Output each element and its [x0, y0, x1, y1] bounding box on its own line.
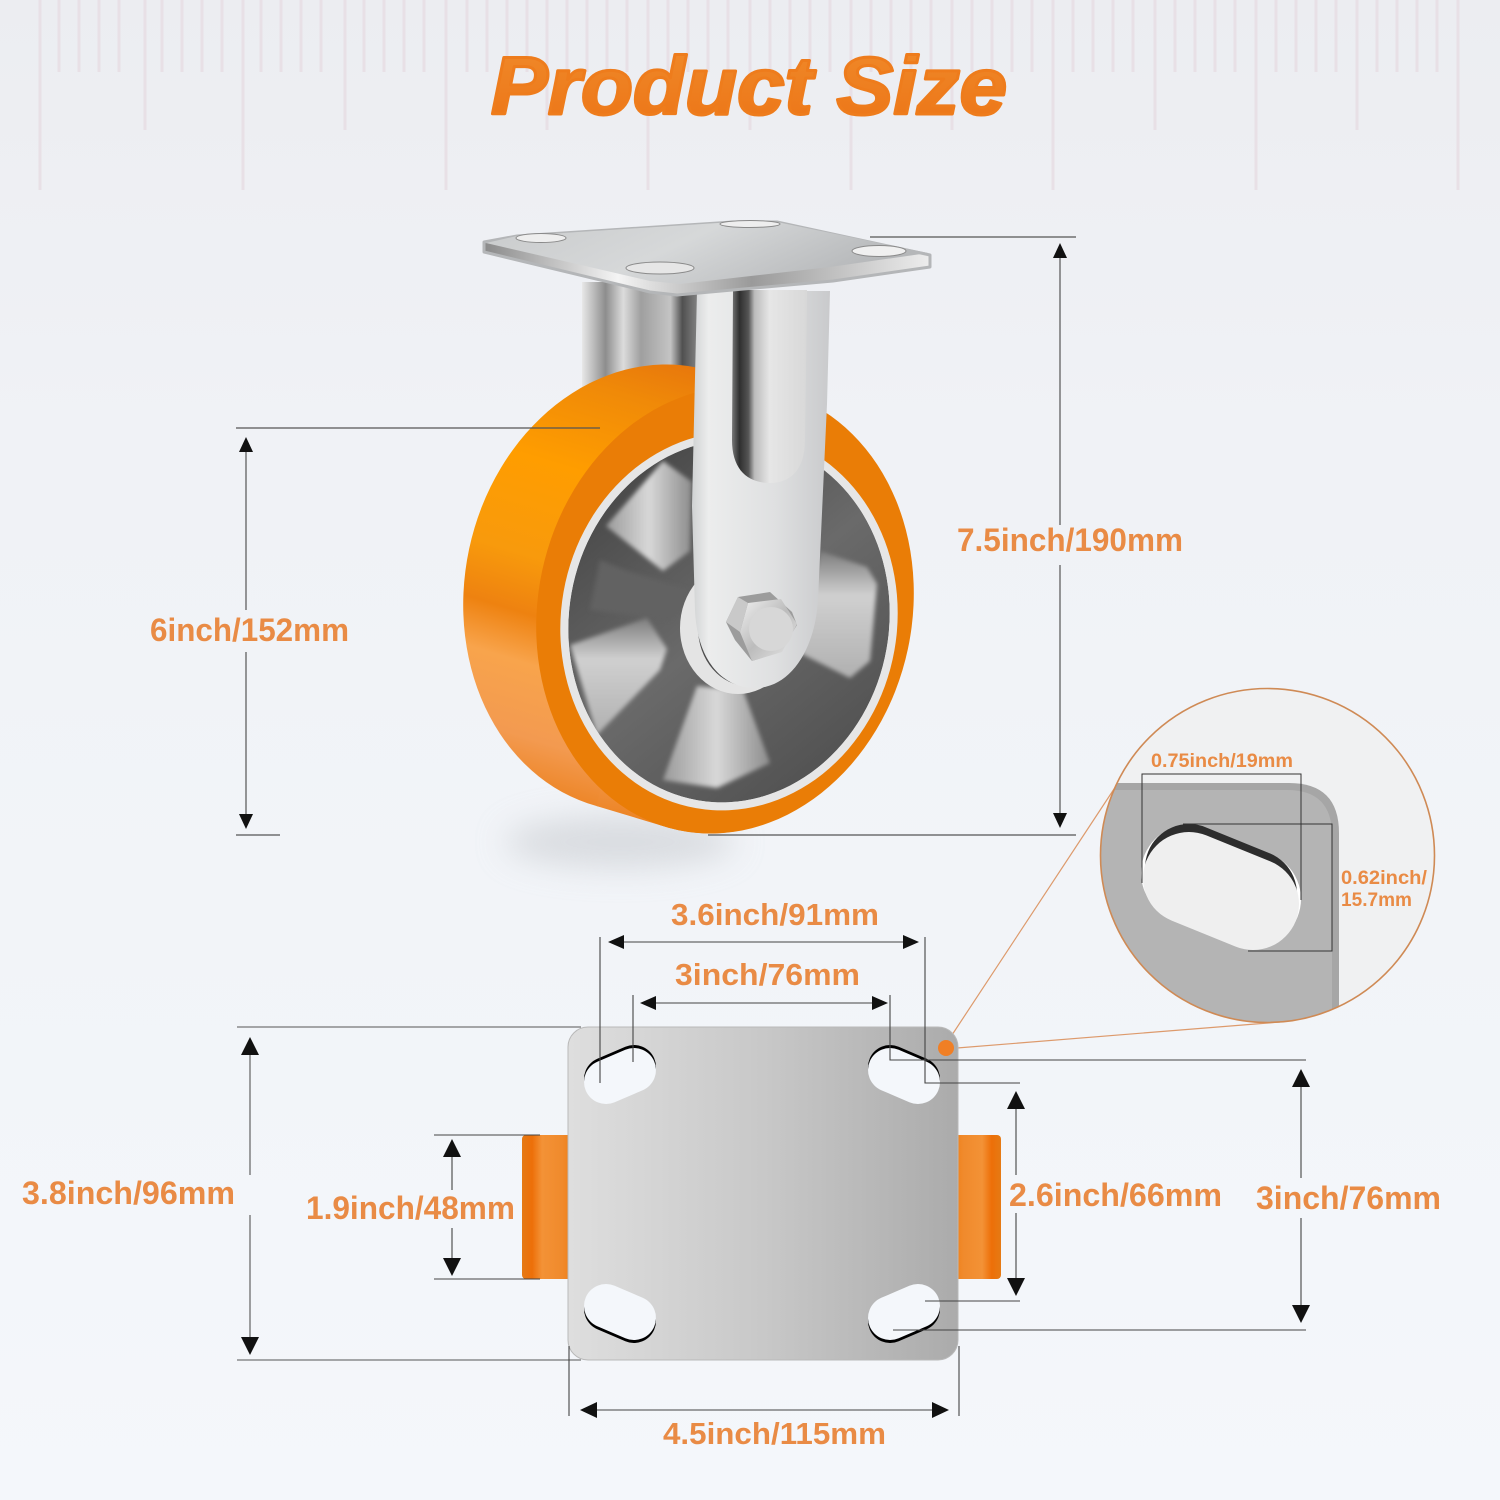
dimension: hole spacing 2.6inch: 2.6inch/66mm: [1009, 1177, 1222, 1213]
floor shadow: [505, 816, 735, 868]
dimension: hole spacing 3inch: 3inch/76mm: [675, 957, 860, 992]
dimension: wheel diameter 6inch: 6inch/152mm: [150, 612, 349, 648]
top mounting plate: [484, 220, 930, 295]
title: Product Size: [491, 41, 1007, 132]
zoomed hole detail: 0.75inch/19mm: [1151, 751, 1293, 772]
dimension: hole spacing 3inch: [633, 957, 1306, 1062]
arm recess: [732, 290, 807, 483]
dimension: wheel width 1.9inch: 1.9inch/48mm: [306, 1190, 515, 1226]
dimension: hole spacing 3inch right: 3inch/76mm: [1256, 1180, 1441, 1216]
rear fork leg: [582, 282, 700, 392]
bottom plate: [568, 1027, 958, 1360]
caster wheel product photo: [422, 220, 955, 869]
fork arm: [692, 291, 830, 688]
dimension: hole spacing 3.6inch: [600, 897, 1020, 1083]
zoomed hole detail: 15.7mm: [1341, 890, 1412, 911]
dimension: hole spacing 3inch right: [893, 1069, 1441, 1330]
washer: [680, 562, 796, 694]
dimension: wheel width 1.9inch: [306, 1135, 540, 1279]
hex bolt: [726, 592, 797, 661]
dimension: plate width 4.5inch: 4.5inch/115mm: [663, 1416, 886, 1451]
dimension: overall height 7.5inch: 7.5inch/190mm: [957, 522, 1183, 558]
dimension: hole spacing 2.6inch: [925, 1091, 1222, 1301]
dimension: overall height 7.5inch: [708, 237, 1183, 835]
hub: [568, 446, 890, 802]
plate corner: [1090, 783, 1339, 1030]
white metal ring: [531, 405, 927, 837]
hole top right: [890, 1067, 918, 1082]
orange marker dot: [938, 1040, 954, 1056]
hole bottom right: [890, 1306, 918, 1321]
wheel tread: [422, 329, 953, 869]
zoomed hole detail: [950, 688, 1434, 1048]
wheel front orange rim: [495, 351, 955, 869]
dimension: plate height 3.8inch: [22, 1027, 581, 1360]
detail measure lines: [1142, 774, 1332, 951]
dimension: wheel diameter 6inch: [150, 428, 600, 835]
orange wheel tabs: [522, 1135, 1001, 1279]
hole top left: [606, 1067, 634, 1082]
dimension: hole spacing 3.6inch: 3.6inch/91mm: [671, 897, 879, 932]
leader lines: [950, 786, 1280, 1048]
dimension: plate width 4.5inch: [569, 1346, 959, 1451]
dimension: plate height 3.8inch: 3.8inch/96mm: [22, 1175, 235, 1211]
zoomed hole detail: 0.62inch/: [1341, 868, 1428, 889]
hole bottom left: [606, 1306, 634, 1321]
ruler ticks background: [40, 0, 1458, 190]
